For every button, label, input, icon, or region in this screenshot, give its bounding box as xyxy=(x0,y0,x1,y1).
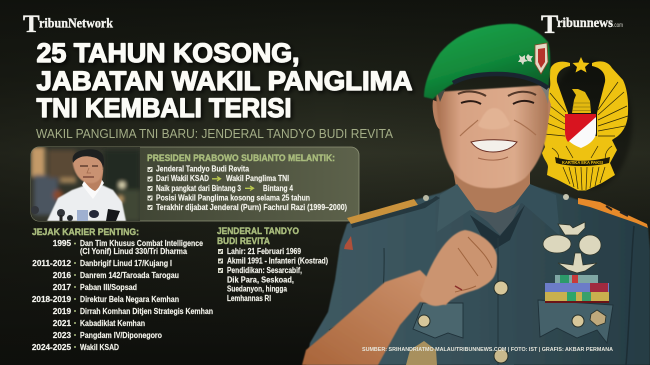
fist xyxy=(420,230,497,306)
photo: Presiden Prabowo xyxy=(31,147,140,223)
sleeve patch xyxy=(344,236,353,250)
hair sides xyxy=(437,90,445,102)
logo: tribunnews xyxy=(541,10,623,39)
profile list: Dik Para, Seskoad, xyxy=(227,276,294,284)
profile list: Lemhannas RI xyxy=(227,294,271,303)
panel checklist: Terakhir dijabat Jenderal (Purn) Fachrul Razi (1999–2000) xyxy=(156,203,347,212)
shield xyxy=(565,114,596,148)
emblem: gold TNI AD crest xyxy=(542,57,632,190)
panel checklist: Naik pangkat dari Bintang 3 xyxy=(156,184,241,193)
logo: tribunnews: ribunnews xyxy=(557,16,613,31)
left epaulet xyxy=(347,199,418,224)
heading: profil jenderal: JENDERAL TANDYO xyxy=(217,226,299,237)
career timeline: 2017 xyxy=(53,283,71,292)
panel: presiden melantik xyxy=(31,147,359,223)
microphones xyxy=(57,209,65,217)
profile list: Suedanyon, hingga xyxy=(227,284,287,294)
soldier portrait xyxy=(302,24,650,365)
career timeline: (CI Yonif) Linud 330/Tri Dharma xyxy=(80,247,187,256)
sleeve crease xyxy=(329,248,384,330)
right pocket xyxy=(538,300,613,343)
emblem: gold TNI AD crest: KARTIKA EKA PAKSI xyxy=(562,160,603,165)
career timeline: 2024-2025 xyxy=(32,343,71,352)
right epaulet xyxy=(578,198,648,228)
career timeline: Dirrah Komhan Ditjen Strategis Kemhan xyxy=(80,307,213,316)
title: JABATAN WAKIL PANGLIMA xyxy=(36,66,412,96)
career timeline: 2023 xyxy=(53,331,71,340)
career timeline: 2021 xyxy=(53,319,71,328)
career timeline: 2016 xyxy=(53,271,71,280)
profile list xyxy=(218,247,328,303)
panel heading: PRESIDEN PRABOWO SUBIANTO MELANTIK: xyxy=(147,153,335,164)
panel checklist xyxy=(148,164,347,212)
pin bottom xyxy=(406,341,437,365)
career timeline: 2011-2012 xyxy=(32,259,71,268)
motto ribbon xyxy=(555,157,610,166)
star xyxy=(572,57,590,72)
title: TNI KEMBALI TERISI xyxy=(36,93,292,123)
crest shadow xyxy=(548,61,632,189)
eagle xyxy=(572,89,591,113)
ears and face xyxy=(433,100,446,129)
panel checklist: Jenderal Tandyo Budi Revita xyxy=(156,164,249,174)
profile list: Akmil 1991 - Infanteri (Kostrad) xyxy=(227,256,328,266)
source credit: SUMBER: SRIHANDRIATMO MALAU/TRIBUNNEWS.COM | FOTO: IST | GRAFIS: AKBAR PERMANA xyxy=(362,347,614,353)
left pocket xyxy=(413,303,463,338)
profile list: Pendidikan: Sesarcabif, xyxy=(227,266,302,275)
hair xyxy=(73,149,104,168)
logo: TribunNetwork: T xyxy=(23,11,40,38)
heading: profil jenderal: BUDI REVITA xyxy=(217,236,270,247)
uniform body xyxy=(306,185,650,365)
buttons xyxy=(494,281,508,295)
career timeline: Pangdam IV/Diponegoro xyxy=(80,331,162,340)
feather lines xyxy=(544,82,628,190)
career timeline: Dan Tim Khusus Combat Intelligence xyxy=(80,239,203,248)
career timeline: 2018-2019 xyxy=(32,295,71,304)
beret xyxy=(424,24,550,99)
career timeline xyxy=(32,239,213,352)
beret band xyxy=(453,74,548,88)
beret stars xyxy=(518,55,528,65)
logo: TribunNetwork: ribunNetwork xyxy=(39,16,113,32)
shirt xyxy=(47,184,126,221)
left wing xyxy=(543,62,570,147)
right wing xyxy=(592,61,628,140)
career timeline: Danbrigif Linud 17/Kujang I xyxy=(80,259,172,268)
collar xyxy=(437,184,478,232)
career timeline: 1995 xyxy=(53,239,71,248)
logo: TribunNetwork xyxy=(23,11,113,38)
beret badge xyxy=(535,43,548,74)
career timeline: 2019 xyxy=(53,307,71,316)
title: 25 TAHUN KOSONG, xyxy=(36,38,300,68)
panel checklist: Bintang 4 xyxy=(263,184,293,193)
logo: tribunnews: T xyxy=(541,10,558,39)
career timeline: Danrem 142/Taroada Tarogau xyxy=(80,271,179,280)
brows and eyes xyxy=(458,92,486,96)
neck xyxy=(452,165,530,214)
forearm xyxy=(302,270,450,365)
title xyxy=(36,38,412,123)
heading: jejak karier: JEJAK KARIER PENTING: xyxy=(32,227,139,238)
career timeline: Wakil KSAD xyxy=(80,343,119,352)
heading: profil jenderal xyxy=(217,226,299,247)
career timeline: Direktur Bela Negara Kemhan xyxy=(80,295,179,304)
insignia badges xyxy=(543,222,601,273)
logo: tribunnews: .com xyxy=(613,23,623,29)
panel checklist: Wakil Panglima TNI xyxy=(226,174,289,183)
smile xyxy=(471,140,517,152)
neck and face xyxy=(84,170,103,191)
subtitle: WAKIL PANGLIMA TNI BARU: JENDERAL TANDYO BUDI REVITA xyxy=(36,127,394,141)
panel checklist: Dari Wakil KSAD xyxy=(156,174,209,183)
ribbons xyxy=(545,275,609,303)
nose xyxy=(478,108,510,129)
lower crest xyxy=(542,136,617,190)
profile list: Lahir: 21 Februari 1969 xyxy=(227,247,301,256)
career timeline: Kabadiklat Kemhan xyxy=(80,319,145,328)
career timeline: Paban III/Sopsad xyxy=(80,283,137,292)
placket xyxy=(487,240,514,365)
panel checklist: Posisi Wakil Panglima kosong selama 25 tahun xyxy=(156,194,310,202)
